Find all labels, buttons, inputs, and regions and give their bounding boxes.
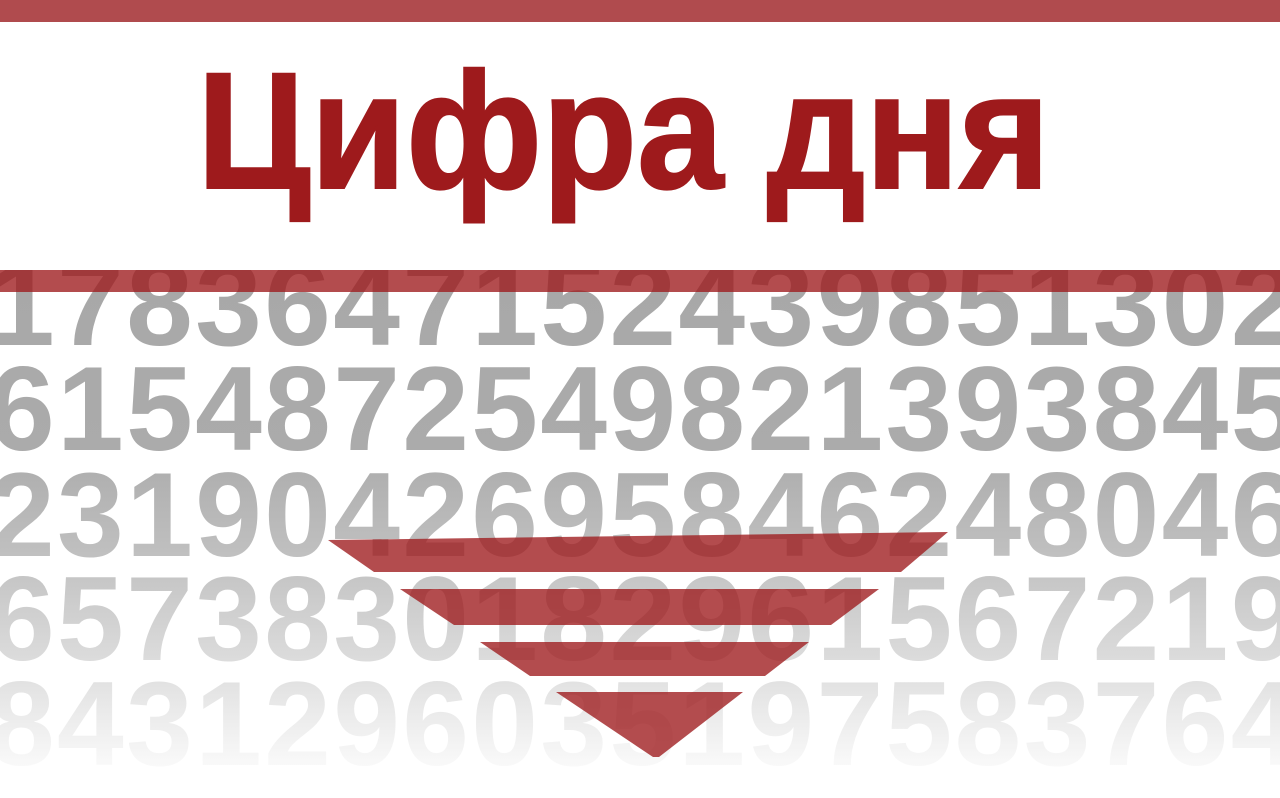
arrow band 3 <box>480 642 809 676</box>
red divider bar over digits <box>0 270 1280 292</box>
background digit rows <box>0 270 1280 758</box>
arrow tip <box>556 692 743 757</box>
arrow band 2 <box>400 589 879 625</box>
downward arrow made of four bands <box>328 532 948 757</box>
arrow band 1 <box>328 532 948 572</box>
top red bar <box>0 0 1280 22</box>
title: Цифра дня <box>197 39 1050 224</box>
background digit rows: 1783647152439851302 <box>0 237 1280 371</box>
